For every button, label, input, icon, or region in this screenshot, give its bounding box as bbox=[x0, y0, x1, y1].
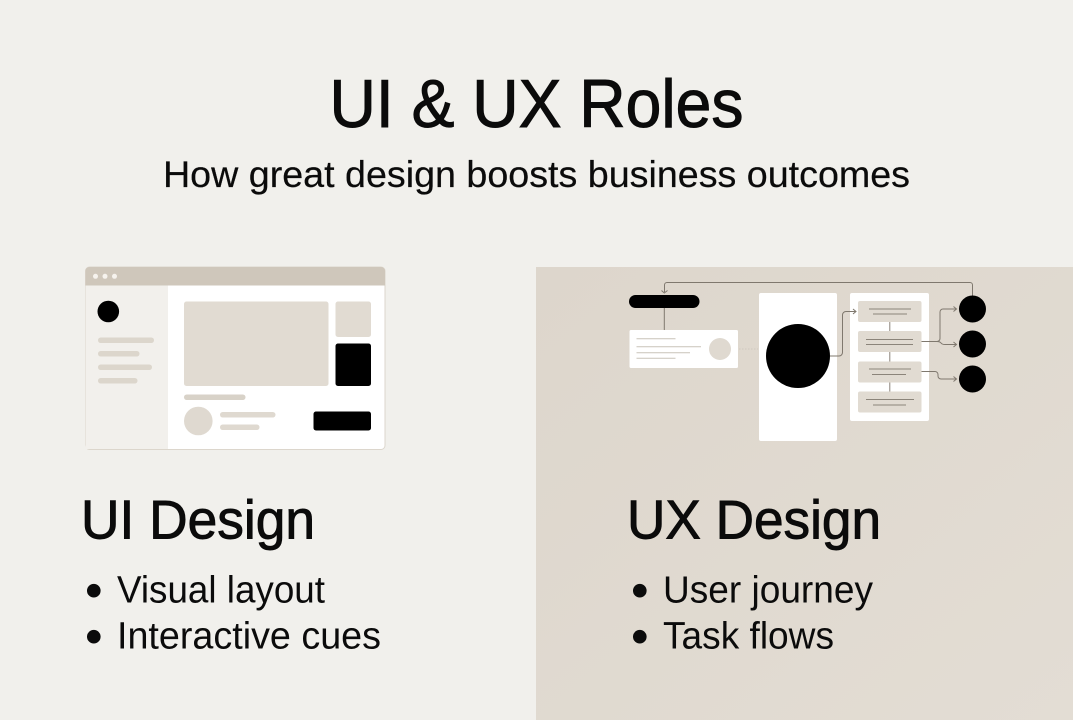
feedback arrow bbox=[664, 282, 972, 296]
journey card bbox=[630, 330, 738, 368]
list: UI Design points: Visual layout bbox=[117, 570, 325, 612]
sidebar avatar bbox=[98, 301, 119, 322]
title: UI & UX Roles bbox=[330, 66, 744, 142]
small card bbox=[336, 302, 371, 337]
black button bbox=[314, 412, 371, 430]
window title bar bbox=[86, 267, 385, 286]
list: UI Design points bbox=[87, 570, 381, 658]
list: UX Design points bbox=[633, 570, 873, 658]
list: UX Design points: Task flows bbox=[663, 616, 834, 658]
illustration: UX flow diagram bbox=[629, 282, 986, 441]
panel: UX background bbox=[536, 267, 1073, 720]
content lines bbox=[220, 412, 276, 418]
list: UX Design points: User journey bbox=[663, 570, 873, 612]
list: UI Design points: Interactive cues bbox=[117, 616, 381, 658]
phone screen bbox=[759, 293, 837, 441]
subtitle: How great design boosts business outcomes bbox=[163, 154, 910, 195]
heading: UI Design: UI Design bbox=[81, 488, 315, 550]
black card bbox=[336, 344, 371, 386]
arrow from phone to tasks bbox=[830, 309, 856, 356]
hero image placeholder bbox=[184, 302, 328, 386]
heading: UX Design: UX Design bbox=[627, 488, 881, 550]
black pill bbox=[629, 295, 700, 308]
outcome circles bbox=[959, 296, 986, 322]
content avatar bbox=[184, 407, 213, 435]
heading line bbox=[184, 394, 246, 400]
task panel bbox=[850, 293, 929, 421]
sidebar menu lines bbox=[98, 338, 154, 384]
branching arrows bbox=[922, 306, 956, 382]
illustration: UI wireframe window bbox=[85, 267, 385, 450]
